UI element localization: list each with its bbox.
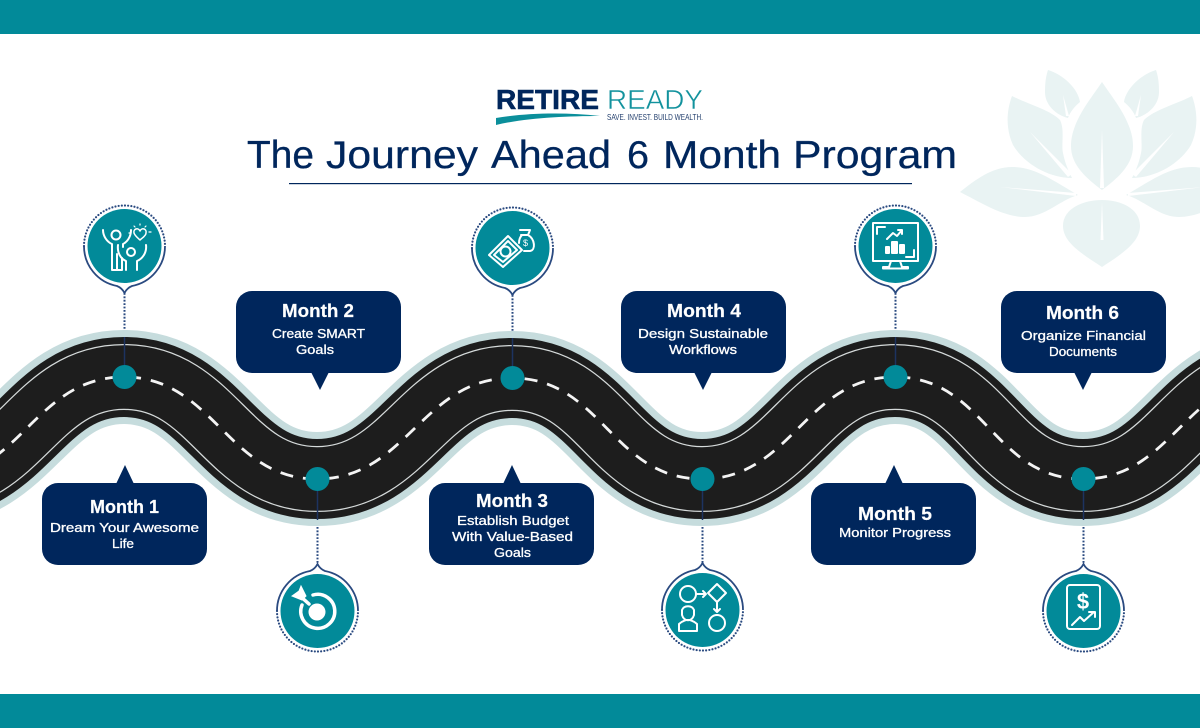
callout: month 5: Monitor Progress bbox=[839, 525, 952, 540]
callout: month 2 bbox=[236, 291, 401, 390]
callout: month 1: Dream Your Awesome bbox=[50, 520, 199, 535]
callout: month 2: Create SMART bbox=[272, 326, 365, 341]
callout: month 4: Workflows bbox=[669, 342, 738, 357]
pin 3: money icon bbox=[472, 208, 553, 378]
callout: month 6: Month 6 bbox=[1046, 303, 1119, 323]
callout: month 1 bbox=[42, 465, 207, 565]
title: 6 bbox=[627, 134, 649, 177]
lotus watermark bbox=[960, 70, 1200, 267]
callout: month 5: Month 5 bbox=[858, 504, 932, 524]
bottom banner bbox=[0, 694, 1200, 728]
pin 2: target icon bbox=[277, 479, 358, 652]
callout: month 6: Documents bbox=[1049, 344, 1118, 359]
callout: month 3: Goals bbox=[494, 545, 532, 560]
logo wordmark: Retire: RETIRE bbox=[496, 84, 599, 115]
callout: month 3: Establish Budget bbox=[457, 513, 569, 528]
title underline bbox=[289, 183, 912, 184]
callout: month 4: Design Sustainable bbox=[638, 326, 768, 341]
logo tagline: SAVE. INVEST. BUILD WEALTH. bbox=[607, 112, 703, 122]
callout: month 6: Organize Financial bbox=[1021, 328, 1146, 343]
callout: month 1: Month 1 bbox=[90, 497, 159, 517]
pin 5: chart on monitor icon bbox=[855, 206, 936, 377]
title: Journey bbox=[326, 134, 479, 177]
callout: month 3: Month 3 bbox=[476, 491, 548, 511]
pin 6: financial document icon bbox=[1043, 479, 1124, 652]
logo bbox=[496, 84, 703, 125]
title: Program bbox=[793, 134, 957, 177]
title: The bbox=[247, 134, 314, 177]
callout: month 2: Month 2 bbox=[282, 301, 354, 321]
callout: month 3: With Value-Based bbox=[452, 529, 573, 544]
dollar sign: $ bbox=[1077, 589, 1089, 614]
winding road bbox=[0, 377, 1200, 479]
road node 2 bbox=[306, 467, 330, 491]
callout: month 2: Goals bbox=[296, 342, 335, 357]
logo wordmark: Ready: READY bbox=[607, 84, 703, 115]
callout: month 4 bbox=[621, 291, 786, 390]
road node 6 bbox=[1072, 467, 1096, 491]
callout: month 3 bbox=[429, 465, 594, 565]
road node 3 bbox=[500, 366, 524, 390]
logo swoosh bbox=[496, 114, 600, 125]
top banner bbox=[0, 0, 1200, 34]
callout: month 1: Life bbox=[112, 536, 134, 551]
road node 4 bbox=[690, 467, 714, 491]
dollar sign: $ bbox=[523, 238, 528, 248]
road node 1 bbox=[112, 365, 136, 389]
pin 1: family icon bbox=[84, 206, 165, 377]
callout: month 4: Month 4 bbox=[667, 301, 741, 321]
road node 5 bbox=[884, 365, 908, 389]
pin 4: workflow icon bbox=[662, 479, 743, 651]
title: Ahead bbox=[491, 134, 611, 177]
callout: month 6 bbox=[1001, 291, 1166, 390]
callout: month 5 bbox=[811, 465, 976, 565]
title: Month bbox=[663, 134, 781, 177]
